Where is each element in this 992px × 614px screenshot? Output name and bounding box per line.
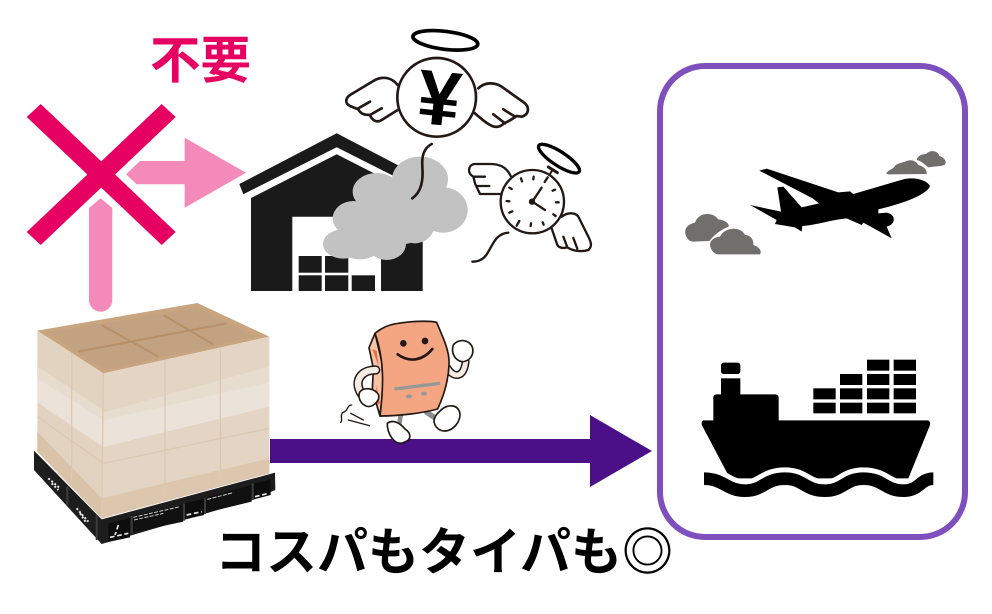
mascot: running box character — [341, 321, 473, 443]
left wing — [346, 78, 398, 121]
body marks — [394, 383, 440, 389]
right arm — [448, 362, 466, 375]
arrow: pink arrow upward from pallet — [89, 198, 112, 312]
clock trail — [472, 233, 508, 262]
right wing — [475, 83, 528, 127]
cloud: right pair — [886, 151, 946, 174]
carton seams — [37, 348, 269, 518]
black plastic pallet — [34, 451, 275, 544]
containers — [813, 360, 916, 413]
icon: cross mark — [27, 104, 176, 245]
left arm — [358, 370, 376, 393]
halo over coin — [412, 27, 479, 53]
clock ticks — [507, 177, 559, 226]
wrapped carton stack — [37, 303, 269, 518]
yen sign: ¥ — [413, 54, 465, 144]
icon: grey smoke cloud — [323, 157, 468, 260]
body front — [375, 321, 449, 416]
arrow: purple arrow to transport — [270, 415, 652, 487]
icon: container ship — [690, 360, 947, 491]
falling trail — [412, 144, 432, 198]
clock halo — [535, 140, 583, 178]
carton left face — [37, 331, 103, 518]
front leg — [399, 416, 401, 428]
arrow: pink arrow to warehouse — [126, 138, 246, 208]
airplane silhouette — [750, 169, 930, 238]
cloud: left pair — [685, 214, 761, 254]
carton top face — [37, 303, 269, 373]
carton front face — [102, 337, 269, 518]
clock hands — [532, 188, 545, 210]
icon: flying yen coin with halo — [346, 27, 528, 198]
body side — [369, 333, 385, 416]
face — [398, 338, 432, 360]
clock crown — [548, 167, 557, 173]
speed lines — [341, 405, 369, 426]
hands — [359, 389, 379, 406]
panel: transport options frame — [660, 66, 965, 537]
heading: not needed: 不要 — [150, 19, 251, 93]
waves — [690, 479, 947, 491]
back leg — [427, 412, 439, 420]
coin — [397, 58, 476, 137]
icon: clouds and airplane — [685, 151, 946, 254]
clock face — [501, 170, 564, 233]
caption: cost and time performance: コスパもタイパも◎ — [215, 511, 673, 585]
clock left wing — [469, 164, 511, 194]
icon: warehouse — [239, 133, 434, 291]
clock right wing — [552, 213, 591, 251]
icon: flying stopwatch with halo — [469, 140, 591, 262]
hull and superstructure — [702, 363, 930, 478]
